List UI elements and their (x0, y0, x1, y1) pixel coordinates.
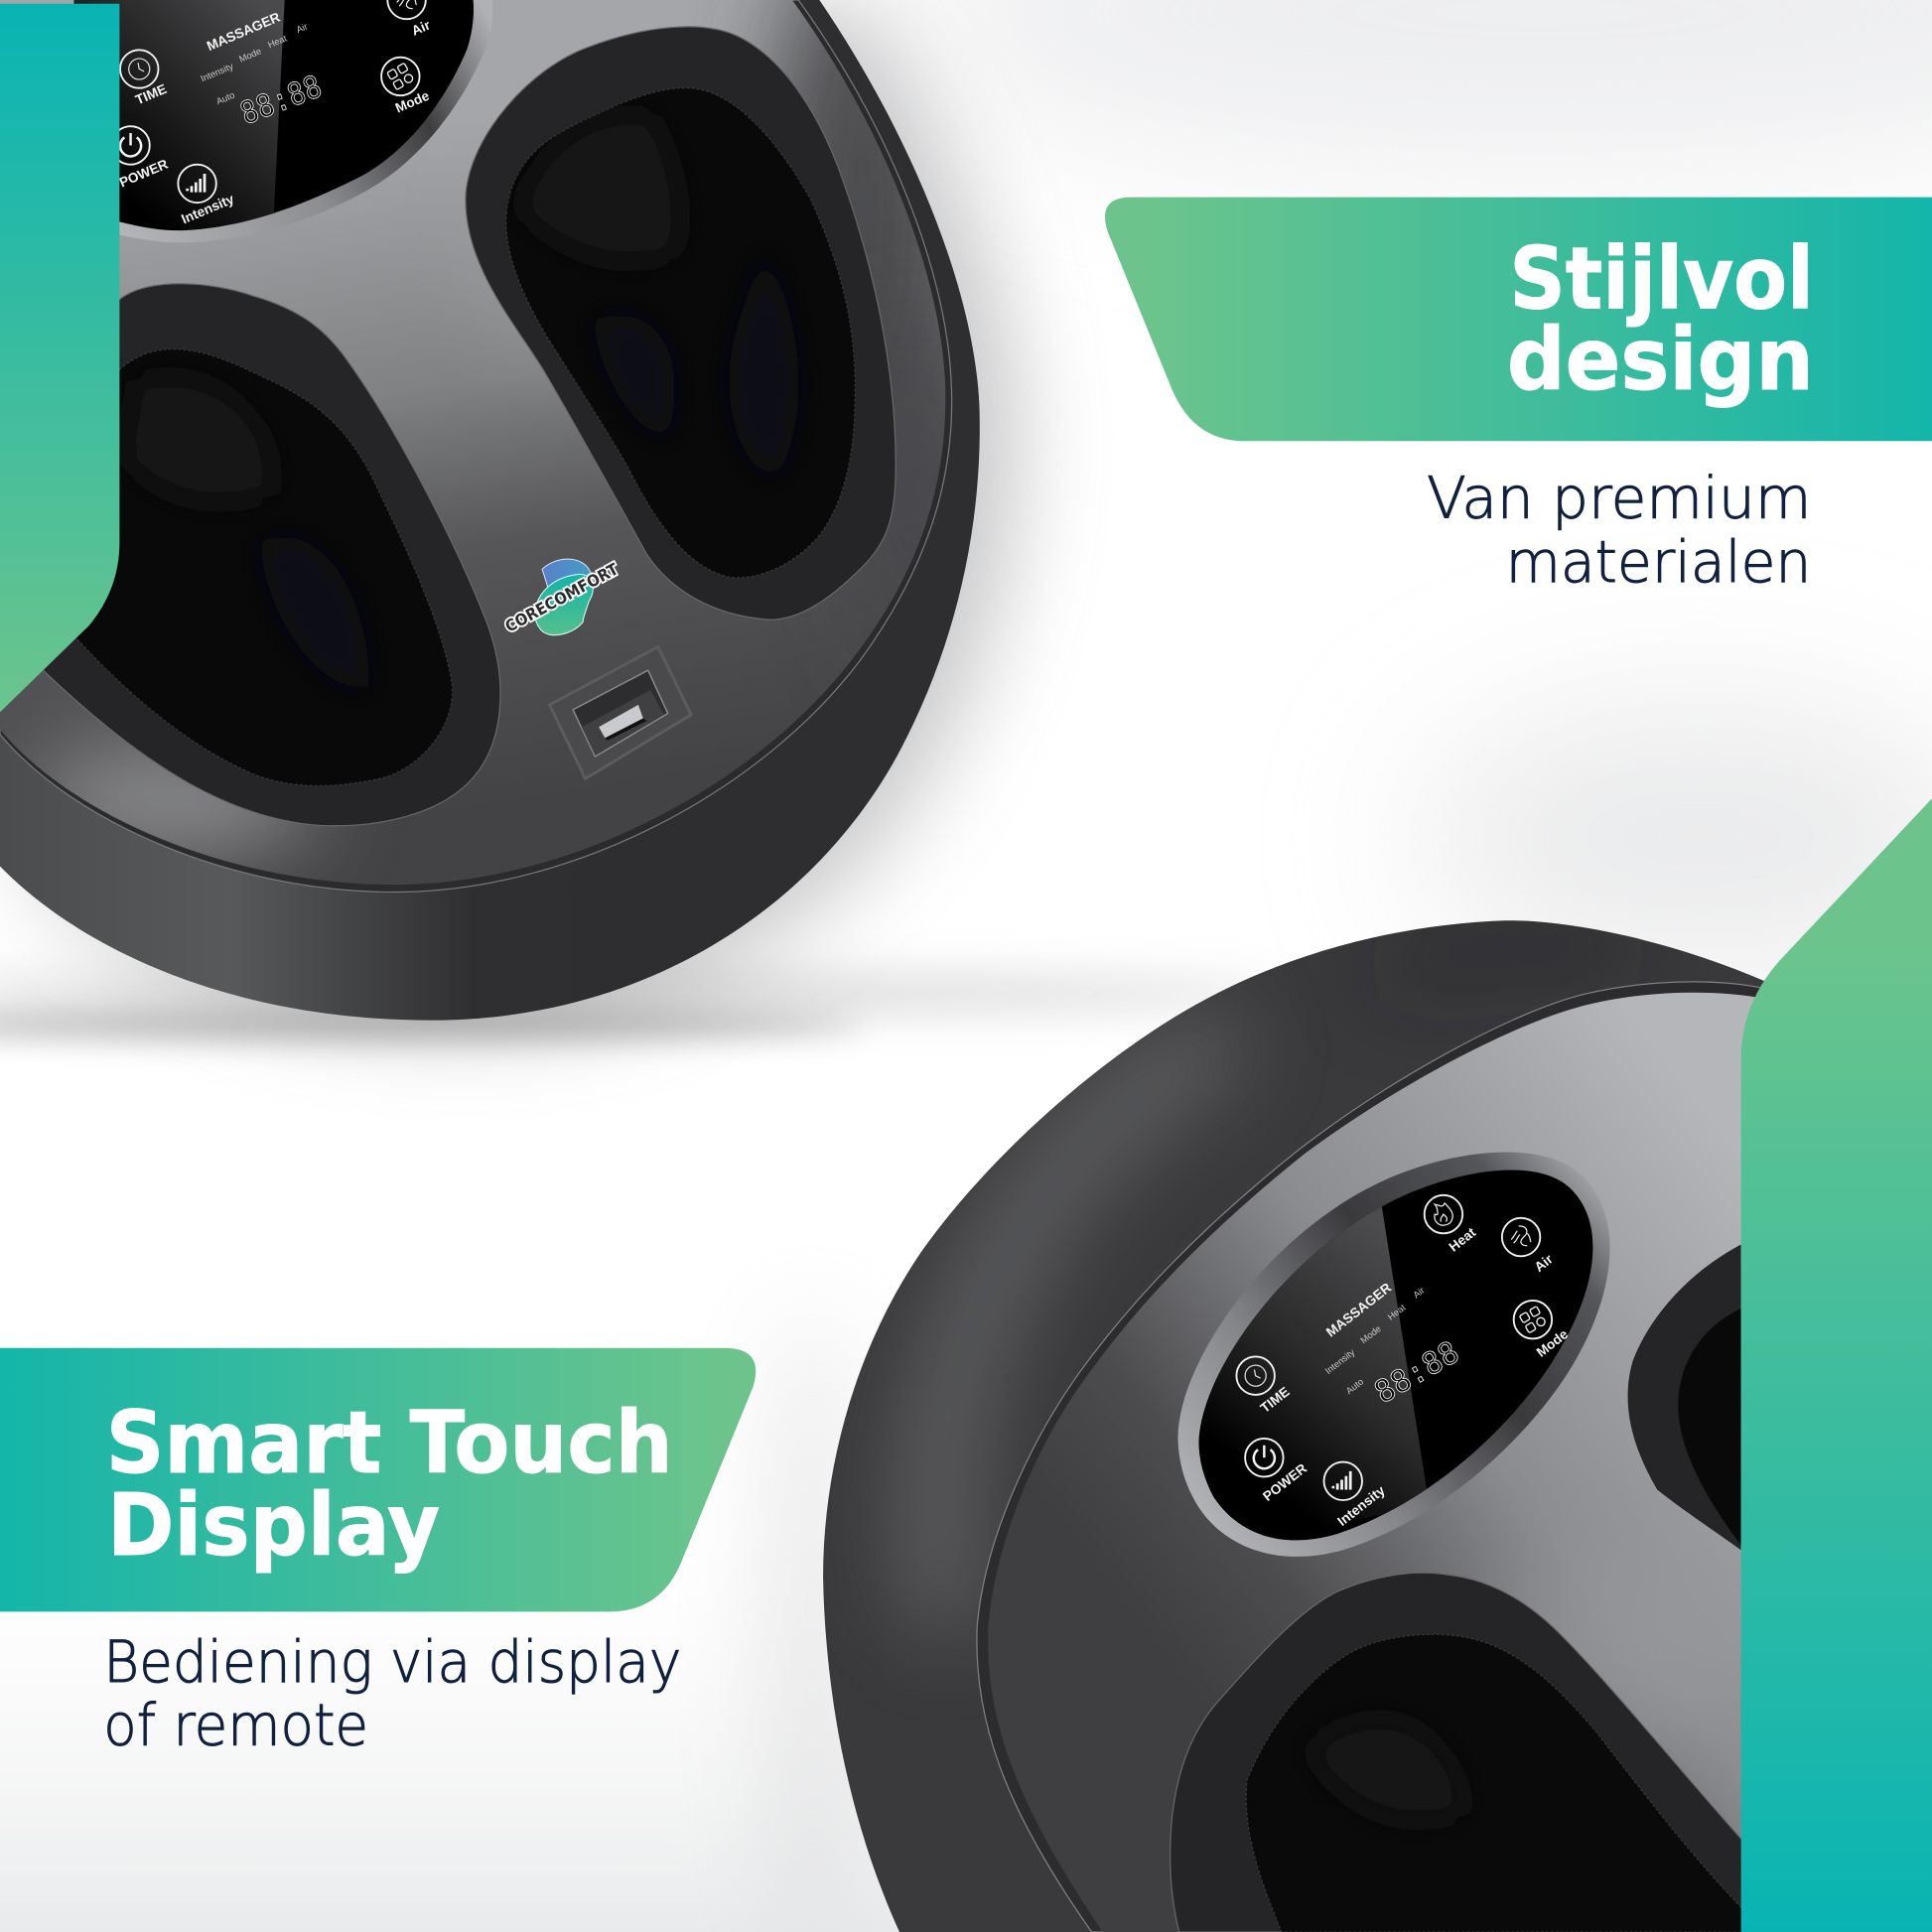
icon: power (1245, 1439, 1284, 1476)
display labels 2: Intensity (1334, 1482, 1388, 1529)
display labels 2: Air (1532, 1251, 1556, 1275)
display labels 1: Mode (393, 88, 432, 115)
left foot opening (0, 284, 500, 826)
machine body 2 (823, 920, 1764, 1932)
machine top plate 2 (988, 993, 1755, 1932)
panel: top-left gradient shape (0, 4, 119, 712)
display ring 1 (73, 0, 492, 242)
display labels 2 (1258, 1224, 1571, 1529)
touch display 2 (1182, 1159, 1592, 1553)
banner: Smart Touch Display (0, 1348, 756, 1611)
text: Van premium materialen (1427, 464, 1811, 596)
display labels 1: MASSAGER (205, 9, 283, 54)
display labels 1: Heat (266, 33, 289, 50)
icon: power (111, 126, 150, 165)
display labels 1: TIME (133, 81, 169, 107)
machine body 1 (0, 0, 980, 1021)
display labels 1: Air (409, 17, 433, 39)
icon: air (387, 0, 426, 19)
machine top plate 1 (0, 0, 986, 899)
display labels 1: Intensity (179, 192, 236, 226)
display labels 2: Air (1412, 1286, 1427, 1300)
display labels 1: POWER (117, 157, 170, 191)
display labels 1: Mode (237, 46, 263, 65)
display labels 1 (117, 9, 433, 226)
icon: time (1236, 1356, 1275, 1395)
text: Van premium materialen: Van premium (1427, 464, 1811, 531)
heading: Stijlvol design: Stijlvol (1509, 228, 1814, 329)
display ring 2 (1177, 1152, 1610, 1557)
logo: Corecomfort: CORECOMFORT (502, 560, 621, 636)
heading: Smart Touch Display: Smart Touch (106, 1393, 673, 1493)
touch display 1 (73, 0, 474, 230)
icon: mode (381, 58, 420, 95)
heading: Stijlvol design (1507, 228, 1814, 410)
heading: Smart Touch Display (106, 1393, 673, 1576)
banner: Stijlvol design (1105, 198, 1932, 441)
text: Bediening via display of remote: of remote (103, 1691, 368, 1758)
icon: mode (1514, 1301, 1552, 1338)
display labels 2: POWER (1260, 1460, 1310, 1504)
icon: intensity (178, 165, 216, 203)
right foot opening (466, 27, 896, 620)
display labels 2: MASSAGER (1323, 1280, 1394, 1340)
display labels 2: Mode (1534, 1326, 1571, 1360)
display labels 2: 88:88 (1368, 1334, 1465, 1411)
product: foot massager top view, lower right (823, 920, 1764, 1932)
panel: right gradient shape (1741, 798, 1932, 1932)
heading: Stijlvol design: design (1507, 310, 1814, 410)
text: Van premium materialen: materialen (1506, 528, 1811, 596)
display labels 2: TIME (1258, 1384, 1293, 1416)
display labels 2: Mode (1358, 1323, 1383, 1345)
icon: heat (1425, 1195, 1462, 1233)
display labels 1: Air (295, 21, 309, 35)
right foot opening, partial (1628, 1244, 1741, 1550)
display labels 2: Heat (1386, 1303, 1408, 1322)
icon: time (120, 50, 158, 88)
lower foot opening, partial (1171, 1573, 1749, 1932)
display labels 1: Auto (214, 90, 236, 106)
display labels 1: Intensity (200, 61, 235, 83)
text: Bediening via display of remote: Bediening via display (103, 1628, 681, 1696)
icon: intensity (1324, 1462, 1362, 1500)
display labels 2: Intensity (1323, 1347, 1357, 1376)
machine rim 1 (0, 0, 952, 893)
icon: air (1502, 1218, 1540, 1256)
display labels 2: Auto (1344, 1376, 1365, 1396)
heading: Smart Touch Display: Display (107, 1475, 440, 1576)
power switch (550, 647, 691, 778)
product: foot massager top view, upper left (0, 0, 986, 1021)
text: Bediening via display of remote (103, 1628, 681, 1758)
display labels 1: 88:88 (235, 69, 327, 132)
display labels 2: Heat (1447, 1224, 1478, 1255)
machine rim 2 (977, 982, 1932, 1932)
